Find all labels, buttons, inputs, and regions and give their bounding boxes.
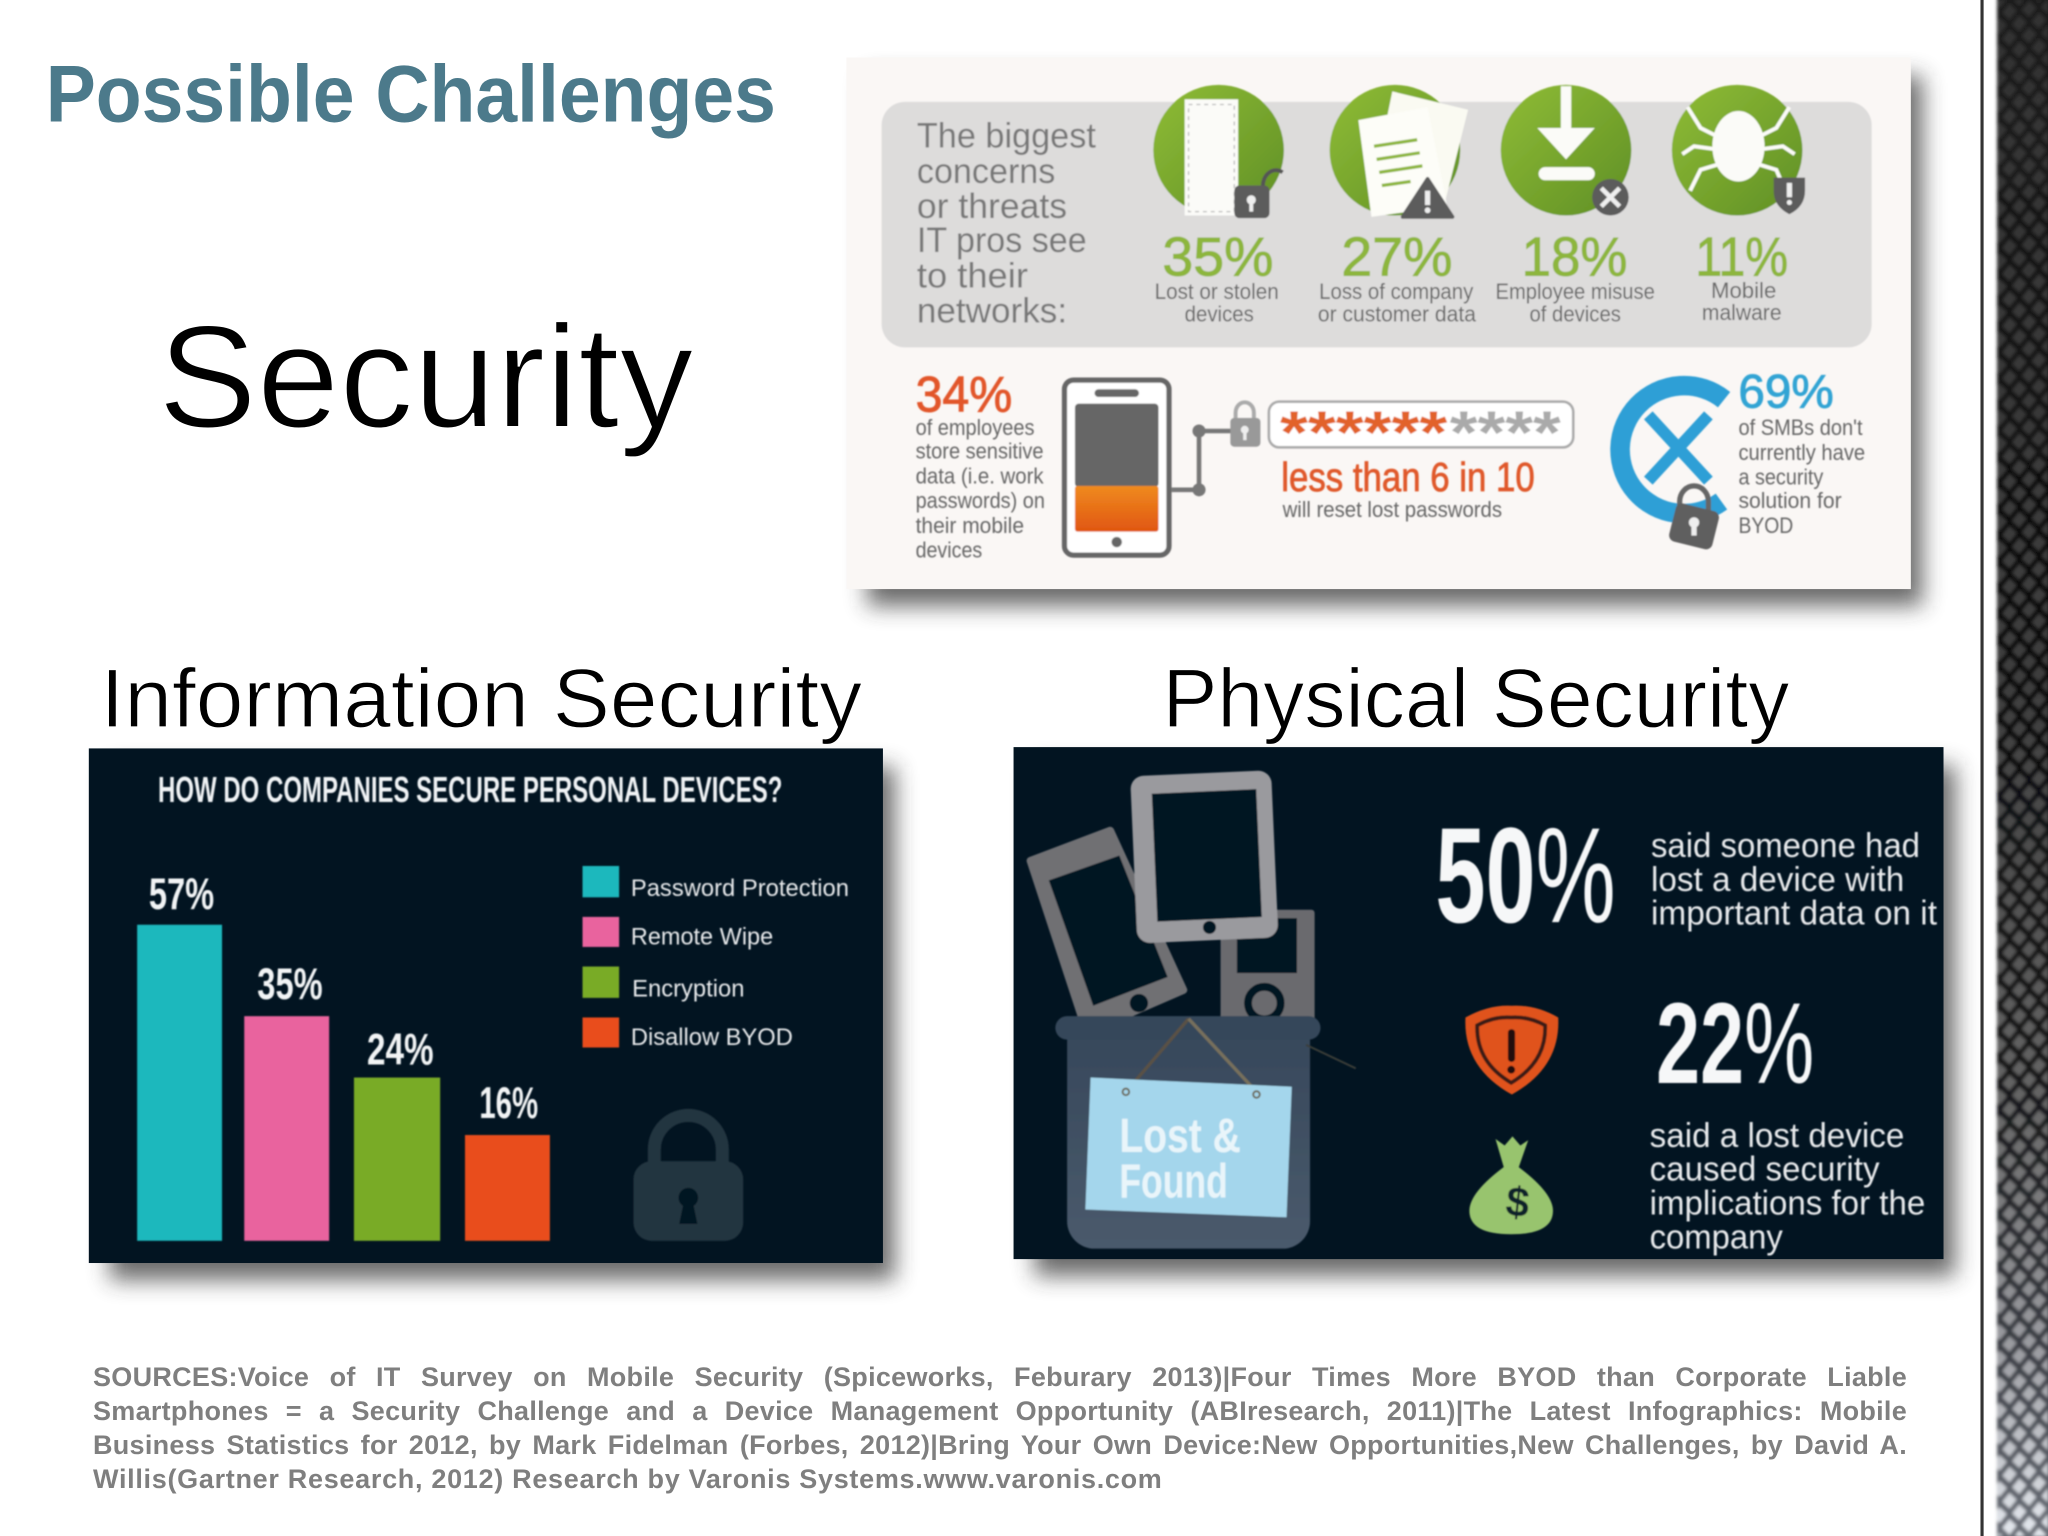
text: concern labels: Loss of company xyxy=(1319,279,1474,304)
text: concern labels: Employee misuse xyxy=(1496,279,1655,304)
stat: less than 6 in 10: less than 6 in 10 xyxy=(1281,454,1535,500)
stat: 22 percent: 22% xyxy=(1656,980,1814,1108)
grey banner xyxy=(882,102,1872,347)
legend: Password Protection xyxy=(631,875,849,902)
text: concern labels: of devices xyxy=(1529,301,1621,326)
sources text block: SOURCES:Voice of IT Survey on Mobile Security (Spiceworks, Feburary 2013)|Four Times More BYOD than Corporate Liable xyxy=(93,1362,1907,1392)
bar chart: 35% xyxy=(257,960,323,1009)
text: concern labels: devices xyxy=(1185,301,1254,326)
sources text block xyxy=(93,1362,1907,1494)
stat: 34 percent: of employees xyxy=(916,415,1034,440)
icon: employee misuse download xyxy=(1501,85,1631,216)
decorative side strip with diamond pattern xyxy=(1980,0,2048,1536)
text: biggest concerns intro: IT pros see xyxy=(917,221,1087,260)
title: Possible Challenges xyxy=(46,49,776,139)
icon: connector and padlock xyxy=(1172,402,1260,496)
stat: 69 percent: solution for xyxy=(1738,488,1842,513)
icon: lost company data xyxy=(1330,85,1468,217)
text: 50 percent description: said someone had xyxy=(1651,827,1920,865)
icon: money bag xyxy=(1469,1136,1553,1234)
stat: 69 percent: currently have xyxy=(1738,440,1865,465)
text: 22 percent description: caused security xyxy=(1650,1151,1880,1189)
stat: 34 percent: store sensitive xyxy=(916,438,1044,463)
bar chart xyxy=(137,870,550,1241)
text: concern labels: Mobile xyxy=(1711,278,1776,303)
stat: 50 percent: 50% xyxy=(1435,799,1616,951)
sources text block: Business Statistics for 2012, by Mark Fidelman (Forbes, 2012)|Bring Your Own Device:New Opportunities,New Challenges, by David A. xyxy=(93,1430,1907,1460)
sources text block: Willis(Gartner Research, 2012) Research by Varonis Systems.www.varonis.com xyxy=(93,1464,1163,1494)
text: biggest concerns intro: or threats xyxy=(917,187,1067,226)
stat: percentages: 11% xyxy=(1695,226,1788,288)
password field: ****** xyxy=(1280,399,1448,466)
text: biggest concerns intro: networks: xyxy=(917,292,1067,331)
text: biggest concerns intro: to their xyxy=(917,256,1028,295)
stat: percentages: 35% xyxy=(1162,226,1273,288)
sources text block: Smartphones = a Security Challenge and a Device Management Opportunity (ABIresearch, 2011)|The Latest Infographics: Mobile xyxy=(93,1396,1907,1426)
text: 22 percent description xyxy=(1650,1117,1925,1257)
illustration: devices in lost and found bucket: Lost & xyxy=(1119,1109,1241,1163)
stat: less than 6 in 10 xyxy=(1281,454,1535,522)
stat: percentages: 27% xyxy=(1341,226,1452,288)
text: 50 percent description: lost a device with xyxy=(1651,861,1904,899)
text: concern labels: Lost or stolen xyxy=(1155,279,1279,304)
icon: padlock xyxy=(633,1115,743,1241)
stat: 69 percent: 69% xyxy=(1738,365,1834,418)
stat: 34 percent: devices xyxy=(916,538,982,563)
stat: 34 percent: 34% xyxy=(916,366,1012,422)
text: 22 percent description: said a lost device xyxy=(1650,1117,1904,1155)
password field xyxy=(1269,399,1573,466)
bar chart: 16% xyxy=(479,1079,538,1128)
stat: percentages xyxy=(1162,226,1788,288)
stat: 69 percent: of SMBs don't xyxy=(1738,415,1863,440)
text: biggest concerns intro xyxy=(917,117,1096,331)
panel: biggest concerns and threats xyxy=(846,57,1923,606)
text: 50 percent description xyxy=(1651,827,1938,933)
stat: percentages: 18% xyxy=(1522,226,1627,288)
panel: how companies secure devices xyxy=(89,748,895,1280)
illustration: devices in lost and found bucket: Found xyxy=(1119,1155,1228,1209)
illustration: devices in lost and found bucket xyxy=(1031,770,1356,1249)
icon: mobile malware bug xyxy=(1672,85,1805,216)
stat: 69 percent: a security xyxy=(1738,465,1824,490)
legend: Remote Wipe xyxy=(631,923,773,950)
icon: phone with battery xyxy=(1064,380,1169,555)
text: concern labels: malware xyxy=(1702,300,1782,325)
stat: 69 percent xyxy=(1738,365,1865,538)
stat: 69 percent: BYOD xyxy=(1738,513,1793,538)
bar chart: 57% xyxy=(149,870,214,919)
legend: Disallow BYOD xyxy=(631,1024,793,1051)
text: biggest concerns intro: concerns xyxy=(917,152,1055,191)
legend xyxy=(583,866,849,1051)
text: 22 percent description: implications for the xyxy=(1650,1185,1925,1223)
icon: lost or stolen device xyxy=(1153,85,1284,218)
chart title: HOW DO COMPANIES SECURE PERSONAL DEVICES? xyxy=(158,769,782,810)
text: biggest concerns intro: The biggest xyxy=(917,117,1096,156)
text: concern labels: or customer data xyxy=(1318,301,1477,326)
heading: Information Security: Information Security xyxy=(101,651,862,745)
text: concern labels xyxy=(1155,278,1782,326)
panel: physical security lost and found xyxy=(1014,747,1955,1276)
text: 22 percent description: company xyxy=(1650,1219,1783,1257)
heading: Physical Security: Physical Security xyxy=(1162,651,1790,745)
icon: money bag: $ xyxy=(1504,1177,1532,1226)
stat: 34 percent: passwords) on xyxy=(916,488,1045,513)
icon: blue C with X and padlock xyxy=(1620,386,1724,551)
password field: **** xyxy=(1450,399,1562,466)
heading: Security: Security xyxy=(158,295,694,458)
stat: 34 percent xyxy=(916,366,1045,563)
legend: Encryption xyxy=(632,976,744,1003)
stat: 34 percent: their mobile xyxy=(916,513,1024,538)
icon: warning shield xyxy=(1465,1006,1558,1095)
stat: 34 percent: data (i.e. work xyxy=(916,463,1044,488)
bar chart: 24% xyxy=(367,1025,434,1074)
text: 50 percent description: important data on it xyxy=(1651,895,1938,933)
stat: less than 6 in 10: will reset lost passwords xyxy=(1282,497,1502,522)
